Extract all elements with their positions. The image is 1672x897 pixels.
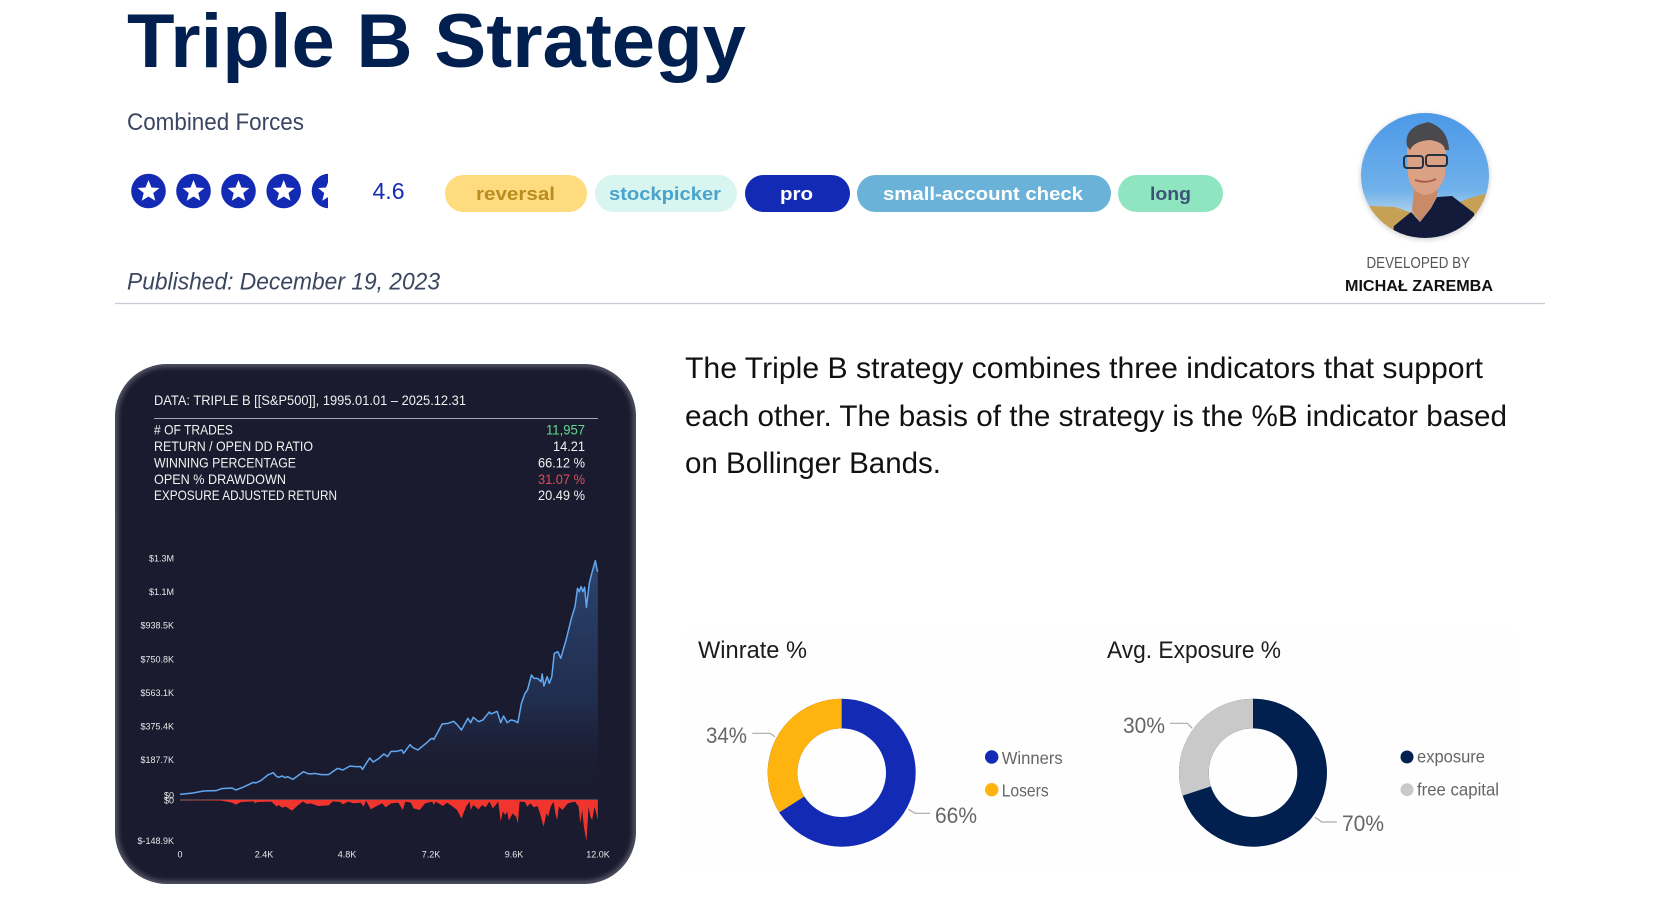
- star rating icons: [131, 174, 346, 208]
- y axis labels: $563.1K: [140, 688, 174, 698]
- rating value: 4.6: [372, 178, 404, 204]
- chart: winrate donut: [698, 637, 1063, 832]
- y axis labels: $938.5K: [140, 620, 174, 630]
- winrate legend: Losers: [1002, 781, 1049, 801]
- y axis labels: $1.1M: [149, 587, 174, 597]
- tag: pro: [745, 175, 850, 212]
- winrate legend: [985, 748, 1063, 801]
- tag: reversal: reversal: [476, 183, 555, 204]
- stats table: 11,957: [546, 422, 585, 438]
- stats table: OPEN % DRAWDOWN: [154, 471, 286, 487]
- tag: stockpicker: stockpicker: [609, 183, 721, 204]
- tag: small-account check: [857, 175, 1111, 212]
- x axis labels: 2.4K: [255, 850, 273, 860]
- winrate leader lines: [752, 733, 930, 813]
- stats table: EXPOSURE ADJUSTED RETURN: [154, 487, 337, 503]
- x axis labels: 12.0K: [586, 850, 610, 860]
- x axis labels: 9.6K: [505, 850, 523, 860]
- exposure leader lines: [1170, 723, 1337, 822]
- stats table: 14.21: [553, 438, 585, 454]
- tag: small-account check: small-account check: [883, 183, 1084, 204]
- y axis labels: $375.4K: [140, 722, 174, 732]
- stats table: 20.49 %: [538, 487, 585, 503]
- tag: reversal: [445, 175, 587, 212]
- stats table: WINNING PERCENTAGE: [154, 454, 296, 470]
- stats table: 66.12 %: [538, 454, 585, 470]
- x axis labels: 0: [177, 850, 183, 860]
- stats table: 31.07 %: [538, 471, 585, 487]
- winrate donut ring: [783, 714, 901, 832]
- stats table: RETURN / OPEN DD RATIO: [154, 438, 313, 454]
- y axis labels: $187.7K: [140, 755, 174, 765]
- winrate percentages: 34%: [706, 723, 747, 748]
- exposure percentages: 70%: [1342, 811, 1384, 836]
- x axis labels: 7.2K: [422, 850, 440, 860]
- stats table: # OF TRADES: [154, 422, 233, 438]
- description paragraph: each other. The basis of the strategy is the %B indicator based: [685, 400, 1507, 433]
- winrate percentages: [706, 723, 977, 828]
- description paragraph: on Bollinger Bands.: [685, 447, 941, 480]
- panel: performance card: [115, 364, 636, 884]
- winrate legend: Winners: [1002, 748, 1063, 768]
- y axis labels: $-148.9K: [137, 836, 174, 846]
- tag: long: [1118, 175, 1223, 212]
- y axis labels: $750.8K: [140, 654, 174, 664]
- exposure legend: exposure: [1417, 746, 1485, 766]
- y axis labels: $1.3M: [149, 554, 174, 564]
- exposure legend: [1400, 746, 1499, 800]
- exposure percentages: [1123, 713, 1384, 836]
- x axis labels: 4.8K: [338, 850, 356, 860]
- equity and drawdown chart: [180, 561, 598, 842]
- winrate percentages: 66%: [935, 803, 977, 828]
- chart: average exposure donut: [1107, 637, 1499, 836]
- title: Triple B Strategy: [127, 0, 746, 84]
- description paragraph: [685, 352, 1507, 480]
- y axis labels: [137, 554, 174, 846]
- tag: long: long: [1150, 183, 1191, 204]
- developer name: MICHAŁ ZAREMBA: [1345, 278, 1493, 295]
- published date: Published: December 19, 2023: [127, 268, 441, 296]
- exposure heading: Avg. Exposure %: [1107, 637, 1281, 664]
- y axis labels: $0: [164, 796, 174, 806]
- developer portrait: [1355, 110, 1495, 242]
- winrate heading: Winrate %: [698, 637, 807, 664]
- tag: stockpicker: [595, 175, 737, 212]
- description paragraph: The Triple B strategy combines three indicators that support: [685, 352, 1483, 385]
- x axis labels: [177, 850, 610, 860]
- exposure percentages: 30%: [1123, 713, 1165, 738]
- y axis labels: $0: [164, 790, 174, 800]
- exposure legend: free capital: [1417, 780, 1499, 800]
- exposure donut ring: [1194, 714, 1312, 832]
- tag: pro: pro: [780, 183, 813, 204]
- stats table: [154, 422, 585, 503]
- subtitle: Combined Forces: [127, 109, 304, 136]
- developed by label: DEVELOPED BY: [1366, 255, 1470, 272]
- card header text: DATA: TRIPLE B [[S&P500]], 1995.01.01 – 2025.12.31: [154, 392, 466, 408]
